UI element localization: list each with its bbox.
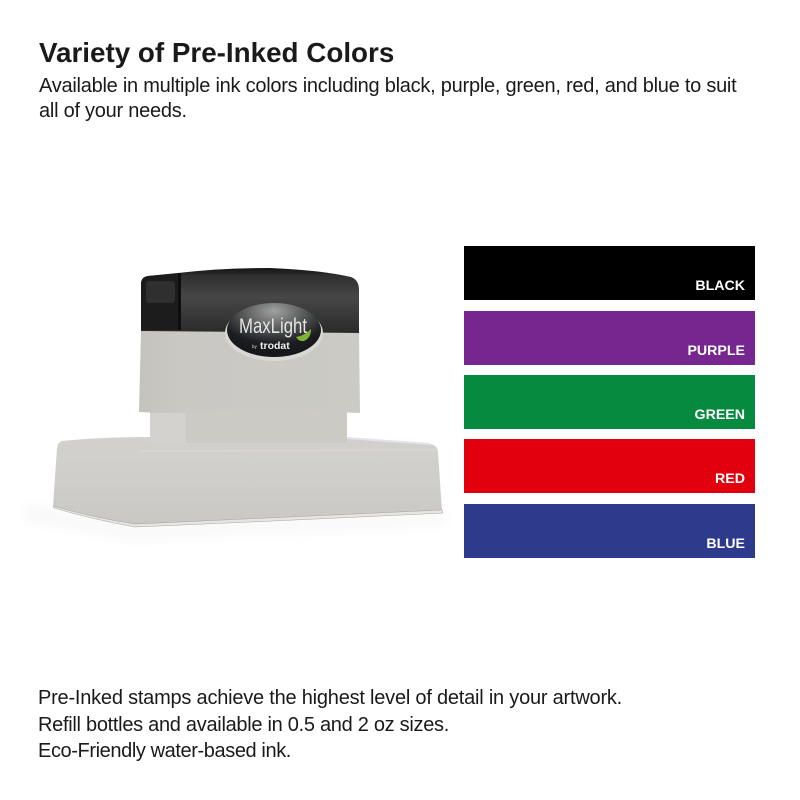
- logo oval: by: [252, 344, 258, 349]
- body: [139, 330, 360, 413]
- swatch: red: [464, 439, 755, 493]
- intro text: Available in multiple ink colors including black, purple, green, red, and blue to suit: [39, 75, 736, 97]
- swatch: purple: PURPLE: [687, 343, 745, 359]
- swatch: green: GREEN: [695, 407, 745, 423]
- handle cap: [141, 268, 359, 333]
- bottom text: Pre-Inked stamps achieve the highest level of detail in your artwork.: [38, 687, 622, 709]
- swatch: black: [464, 246, 755, 300]
- intro text: all of your needs.: [39, 100, 187, 122]
- swatch: green: [464, 375, 755, 429]
- logo oval: trodat: [260, 340, 290, 352]
- product image: pre-inked stamp: [52, 268, 444, 528]
- neck: [150, 405, 347, 443]
- base shadow: [25, 508, 445, 536]
- bottom text: Eco-Friendly water-based ink.: [38, 740, 291, 762]
- swatch: blue: [464, 504, 755, 558]
- swatch: red: RED: [715, 471, 745, 487]
- base: [53, 437, 443, 527]
- swatch: purple: [464, 311, 755, 365]
- bottom text: [38, 687, 622, 762]
- swatch: blue: BLUE: [706, 536, 745, 552]
- title: Variety of Pre-Inked Colors: [39, 37, 394, 68]
- logo oval: MaxLight: [239, 315, 307, 338]
- swatch: black: BLACK: [695, 278, 745, 294]
- bottom text: Refill bottles and available in 0.5 and 2 oz sizes.: [38, 714, 449, 736]
- logo oval: [225, 303, 323, 361]
- intro text: [39, 75, 737, 122]
